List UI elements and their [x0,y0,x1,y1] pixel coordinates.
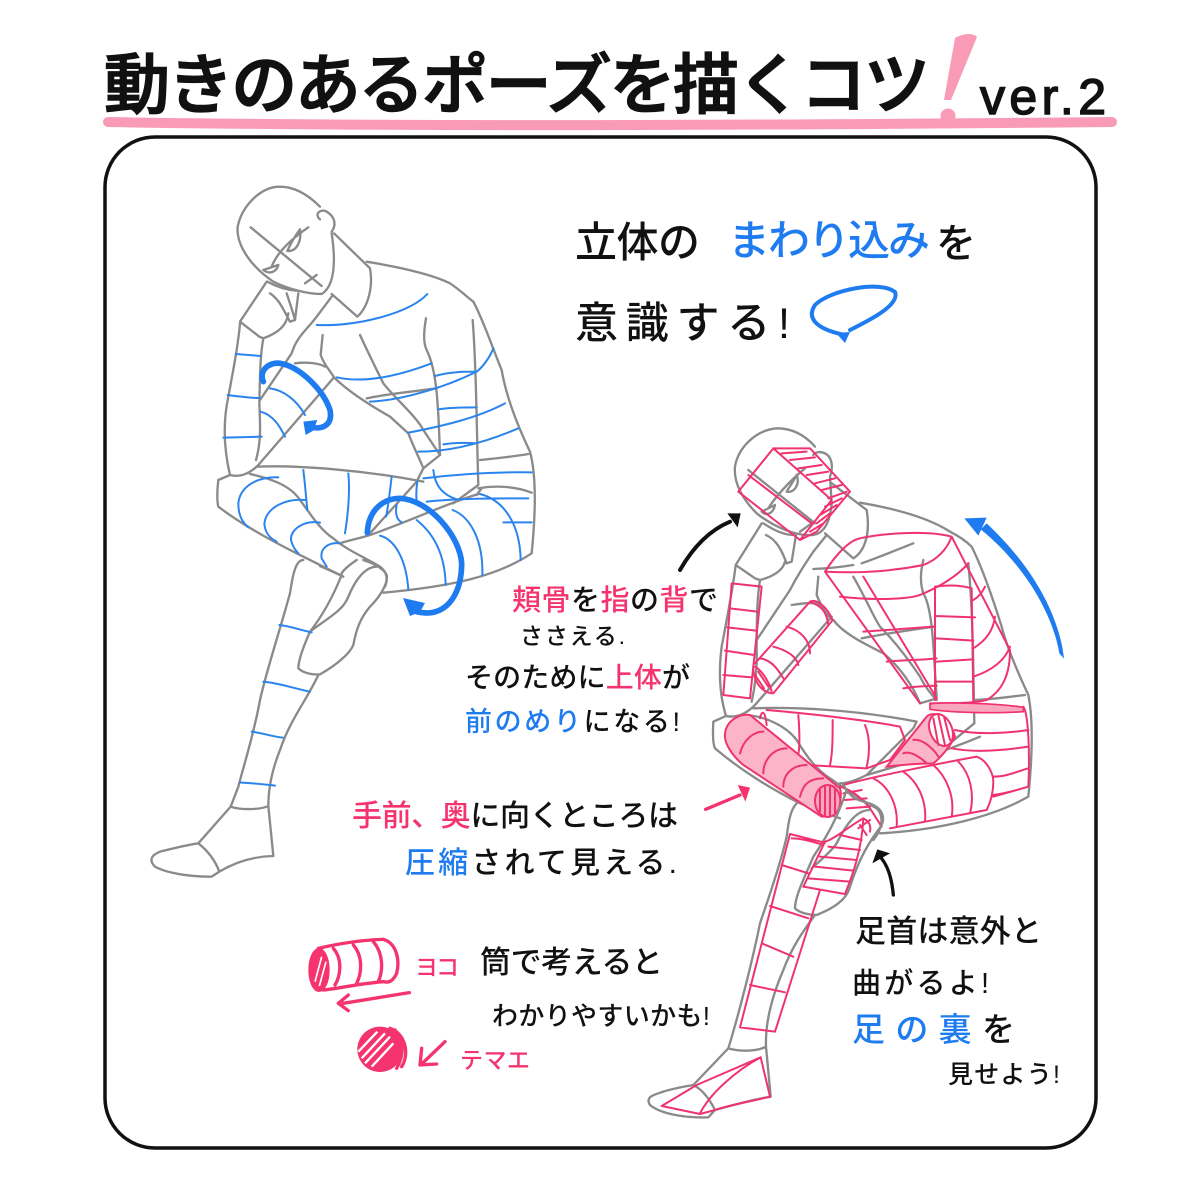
text: foreshortening note: 圧縮されて見える. [405,847,677,880]
text: foreshortening note: 手前、奥に向くところは [352,800,678,833]
arrow: blue around thigh [367,498,462,616]
title: ver.2 [980,69,1106,125]
text: foreshortening note [352,800,678,880]
upper body, left figure [217,187,535,593]
text: think in tubes [480,945,710,1031]
heading: be aware of wrap-around: まわり込み [728,217,930,264]
panel: rounded frame [105,137,1096,1148]
text: think in tubes: わかりやすいかも! [492,1001,710,1031]
figure: right pose, gray with pink block construction [649,428,1032,1117]
figure: left pose, gray with blue contour lines [151,187,535,877]
pink upper arm block [935,586,975,703]
pink near thigh cylinder [840,757,993,828]
title: 動きのあるポーズを描くコツ [104,48,930,122]
text: ankle note: 足の裏 を [852,1011,1015,1048]
text: cheekbone note: 前のめりになる! [465,707,680,737]
label: horizontal: ヨコ [415,954,459,980]
arrow: black pointing to ankle [872,849,893,895]
icon: end-on tube with arrow [357,1027,445,1072]
pink raised arm block [723,583,762,698]
arrow: pink pointing to foreshortened thigh [706,785,750,809]
lower leg and foot, right figure [649,785,883,1117]
text: ankle note: 曲がるよ! [852,967,989,1000]
heading: be aware of wrap-around: を [936,222,976,266]
text: cheekbone note: そのために上体が [465,662,690,693]
text: ankle note: 見せよう! [948,1061,1060,1089]
upper body gray, right figure [713,428,1032,840]
heading: be aware of wrap-around: 意識する! [575,300,790,348]
title [104,34,1106,125]
arrow: blue around forearm [262,363,331,435]
text: cheekbone note: 頬骨を指の背で [512,584,718,617]
label: toward viewer: テマエ [460,1047,530,1073]
pink filled foreshortened cylinder, upper thigh [725,715,841,817]
text: cheekbone note: ささえる. [520,623,625,649]
title underline [108,122,1112,125]
text: think in tubes: 筒で考えると [480,945,663,980]
pink forearm cylinder [753,601,833,693]
arrow: blue curved along back [964,518,1064,659]
pink head box [738,448,850,540]
heading: be aware of wrap-around: 立体の [575,219,700,266]
arrow: black pointing to cheekbone [680,513,741,570]
pink hip and thigh blocks [760,710,905,768]
lower leg and foot, left figure [151,560,387,877]
heading: be aware of wrap-around [575,217,976,348]
pink filled foreshortened cylinder, far thigh [887,714,955,767]
icon: blue loop [812,287,896,343]
pink torso block [825,533,1010,703]
icon: horizontal tube with arrow [310,939,409,1011]
text: ankle note [852,914,1060,1089]
text: ankle note: 足首は意外と [855,914,1042,949]
text: cheekbone note [465,584,718,737]
